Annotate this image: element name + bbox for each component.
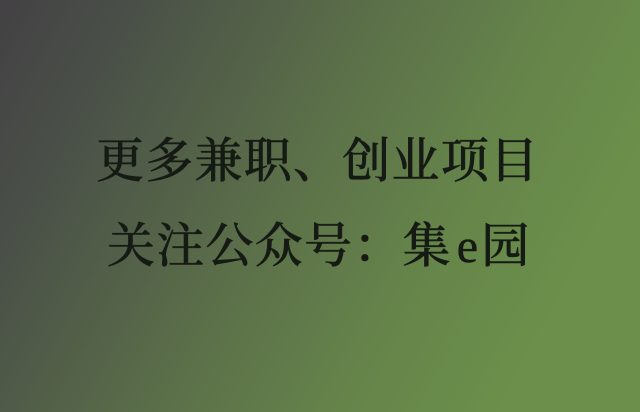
heading: line one: 更多兼职、创业项目 — [96, 135, 539, 188]
heading: line two: 关注公众号：集e园 — [107, 220, 531, 273]
